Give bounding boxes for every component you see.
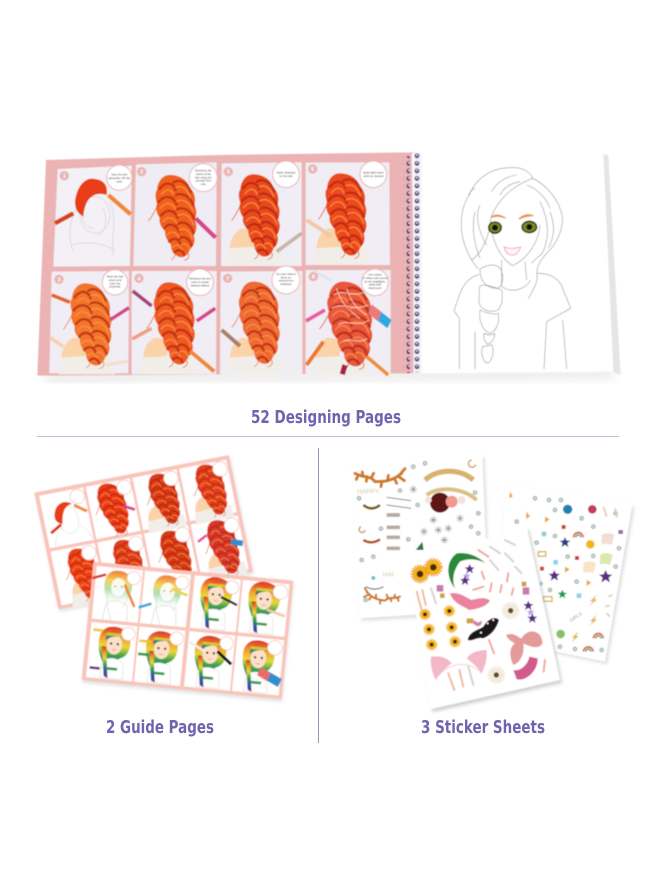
step 2 panel: only	[201, 182, 206, 186]
green bow	[448, 553, 486, 588]
sticker sheet A: leaves and florals: HAPPY	[357, 488, 380, 495]
sticker sheets illustration	[352, 455, 634, 712]
step 1 panel: color	[116, 179, 122, 183]
step 8 panel: 8	[312, 275, 315, 281]
sticker sheet B: stars, rainbows, butterflies: GIRLS	[569, 611, 583, 623]
large sunflowers	[412, 559, 441, 582]
step 7 panel: Go over what is	[276, 272, 296, 276]
spiral binding	[403, 152, 421, 374]
heading: 3 Sticker Sheets: 3 Sticker Sheets	[421, 717, 545, 738]
step 8 panel: lastly add	[369, 283, 381, 287]
step 8 panel: for the highlights,	[364, 279, 386, 283]
step 7 panel: second hue	[279, 279, 294, 283]
right page: girl colouring outline	[412, 153, 621, 375]
guide sheet 2: rainbow hair steps	[81, 562, 294, 702]
step 8 panel	[306, 269, 392, 375]
step 5 panel: on the hair	[279, 174, 293, 178]
step 5 panel: 5	[227, 170, 230, 176]
step 3 panel	[49, 270, 129, 374]
step 3 panel: Draw the hair	[107, 275, 123, 279]
step 6 panel: color as needed	[363, 174, 384, 178]
step 2 panel: Reinforce the	[195, 169, 212, 173]
step 1 panel: Give the first	[111, 173, 127, 177]
step 7 panel	[220, 266, 302, 375]
step 3 panel: color the	[110, 281, 121, 285]
step 4 panel: shadow effects	[191, 283, 210, 287]
sticker sheet A: leaves and florals	[352, 455, 490, 621]
step 3 panel: 3	[58, 277, 61, 283]
heading: 52 Designing Pages: 52 Designing Pages	[251, 407, 401, 428]
pink satin bow	[506, 631, 543, 665]
guide sheet 1: hair steps	[34, 455, 254, 612]
sticker sheet A: leaves and florals: HAI	[383, 572, 394, 579]
step 2 panel: 2	[140, 170, 143, 176]
step 4 panel: color to create	[191, 280, 209, 284]
book shadow	[45, 370, 616, 382]
cat ear headband	[431, 656, 452, 680]
step 2 panel	[133, 162, 217, 266]
black bow	[468, 618, 499, 640]
sticker sheet C: sunflowers, bows and cat ears	[408, 527, 562, 712]
step 2 panel: colors of the	[196, 172, 211, 176]
step 3 panel: colors and	[108, 278, 122, 282]
step 7 panel: there on	[281, 275, 292, 279]
step 6 panel: Apply light tones	[363, 171, 384, 175]
step 1 panel	[53, 165, 132, 267]
daisies	[490, 604, 517, 681]
horizontal divider	[37, 436, 619, 437]
step 7 panel: shadows	[280, 282, 292, 286]
step 7 panel: 7	[226, 276, 229, 282]
step 2 panel: hair using the	[195, 175, 212, 179]
step 6 panel: 6	[311, 167, 314, 173]
step 6 panel	[306, 161, 390, 265]
step 8 panel: Use eraser	[368, 273, 382, 277]
small sunflowers	[420, 606, 460, 650]
scrunchie	[513, 657, 538, 680]
sticker sheet B: stars, rainbows, butterflies	[502, 484, 634, 664]
heading: 2 Guide Pages: 2 Guide Pages	[106, 717, 214, 738]
vertical divider	[318, 448, 319, 743]
left page: hair colouring guide	[37, 152, 417, 376]
open sketch book	[37, 152, 621, 382]
step 8 panel: or white color pencil	[362, 276, 388, 280]
step 1 panel: 1	[63, 174, 66, 180]
step 4 panel: Reinforce the key	[189, 277, 211, 281]
pink bow	[450, 593, 490, 610]
step 8 panel: final touch	[369, 286, 382, 290]
step 5 panel	[221, 161, 302, 266]
step 4 panel: 4	[138, 276, 141, 282]
step 3 panel: long hair	[110, 285, 120, 289]
guide pages illustration	[34, 455, 294, 702]
step 1 panel: going like, fill hair	[108, 176, 130, 180]
step 2 panel: stronger line	[196, 179, 212, 183]
step 5 panel: Apply shadows	[276, 171, 295, 175]
step 4 panel	[132, 269, 217, 374]
